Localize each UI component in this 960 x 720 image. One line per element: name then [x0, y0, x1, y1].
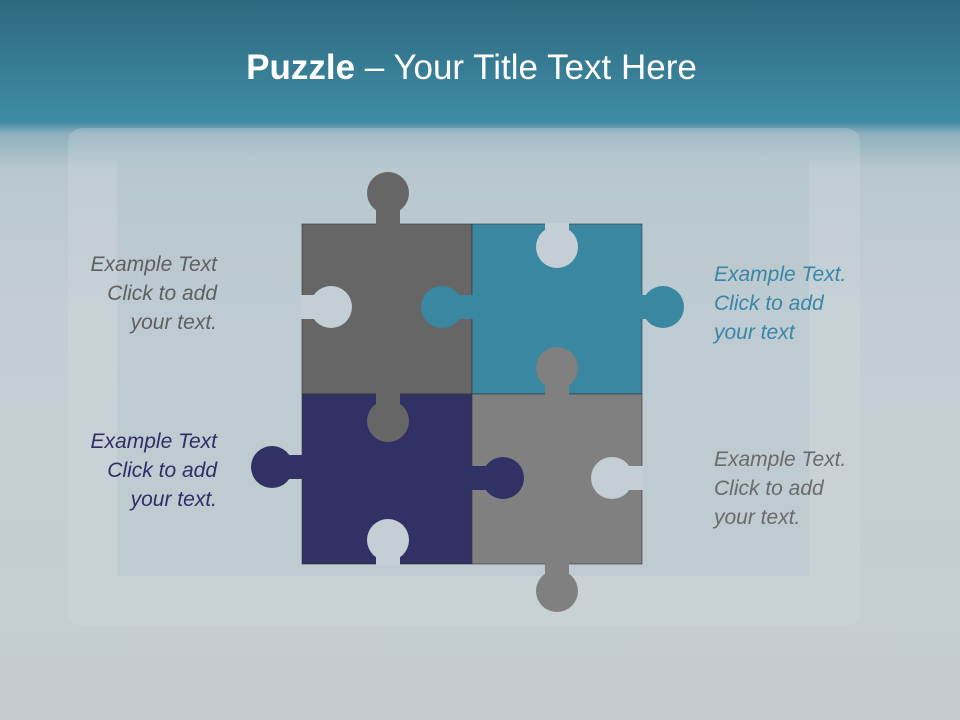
text: top left — [91, 253, 218, 334]
text: top right — [712, 263, 846, 344]
text: bottom left: Click to add — [107, 459, 217, 482]
piece: top left — [302, 224, 472, 394]
text: top left: Example Text — [91, 253, 217, 276]
text: bottom right — [712, 448, 846, 529]
text: top right: your text — [714, 321, 795, 344]
text: top left: Click to add — [107, 282, 217, 305]
text: bottom right: Example Text. — [714, 448, 846, 471]
text: top left: your text. — [131, 311, 217, 334]
tabs — [251, 172, 684, 612]
title: Puzzle – Your Title Text Here — [246, 48, 697, 87]
text: bottom right: Click to add — [714, 477, 824, 500]
piece: bottom right — [472, 394, 642, 564]
text: bottom left — [91, 430, 218, 511]
text: top right: Click to add — [714, 292, 824, 315]
holes — [301, 223, 643, 565]
text: bottom right: your text. — [714, 506, 800, 529]
piece: bottom left — [302, 394, 472, 564]
text: bottom left: your text. — [131, 488, 217, 511]
text: bottom left: Example Text — [91, 430, 217, 453]
piece: top right — [472, 224, 642, 394]
text: top right: Example Text. — [714, 263, 846, 286]
